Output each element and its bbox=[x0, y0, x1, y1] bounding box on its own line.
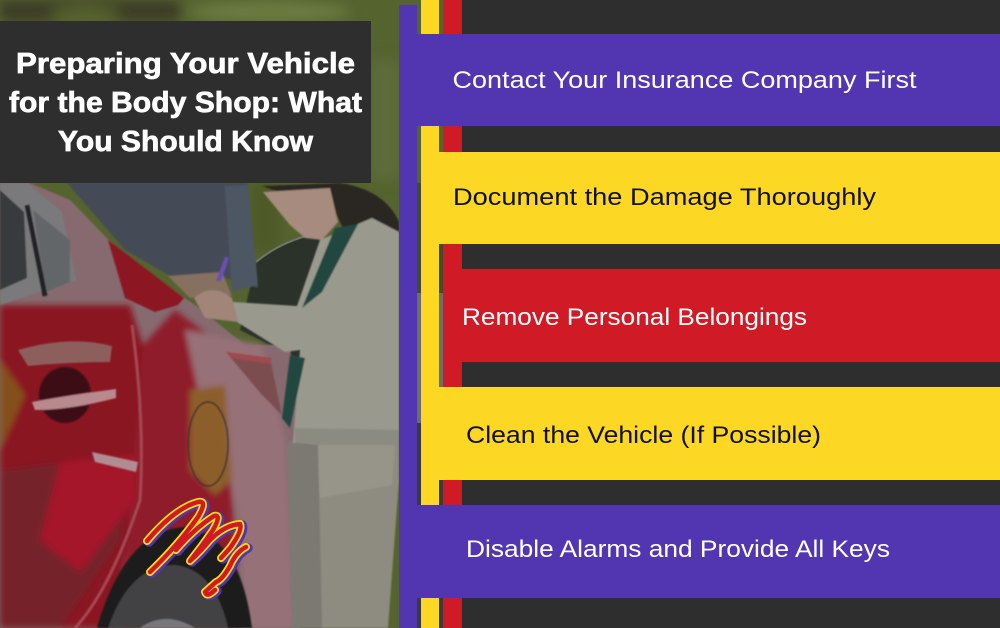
step 5 bar: Disable Alarms and Provide All Keys bbox=[466, 536, 890, 563]
icon: MJ script logo bbox=[147, 502, 248, 596]
background car bbox=[240, 232, 325, 360]
vertical stripe: yellow bbox=[421, 0, 439, 628]
front wheel and tyre bbox=[97, 527, 252, 628]
vertical stripe: purple bbox=[399, 5, 417, 628]
step 2 bar: Document the Damage Thoroughly bbox=[453, 184, 876, 211]
man's shirt bbox=[67, 183, 258, 298]
car body bbox=[0, 183, 300, 628]
step 3 bar: Remove Personal Belongings bbox=[462, 304, 807, 331]
step 4 bar: Clean the Vehicle (If Possible) bbox=[466, 422, 821, 449]
title panel: Preparing Your Vehicle bbox=[16, 48, 355, 80]
title panel: for the Body Shop: What bbox=[9, 87, 362, 119]
title panel: You Should Know bbox=[58, 126, 313, 158]
step 1 bar bbox=[417, 34, 1000, 126]
step 3 bar bbox=[443, 269, 1000, 362]
vertical stripe: red bbox=[443, 0, 462, 628]
car roof and window bbox=[0, 183, 76, 305]
step 5 bar bbox=[417, 505, 1000, 598]
background photo: damaged red car with two people bbox=[0, 0, 470, 628]
step 1 bar: Contact Your Insurance Company First bbox=[452, 67, 917, 94]
woman bbox=[194, 183, 399, 628]
step 2 bar bbox=[421, 152, 1000, 244]
step 4 bar bbox=[421, 387, 1000, 480]
dark background of the list panel bbox=[462, 0, 1000, 628]
title panel bbox=[0, 21, 371, 183]
right side background below the greenery bbox=[399, 183, 470, 293]
